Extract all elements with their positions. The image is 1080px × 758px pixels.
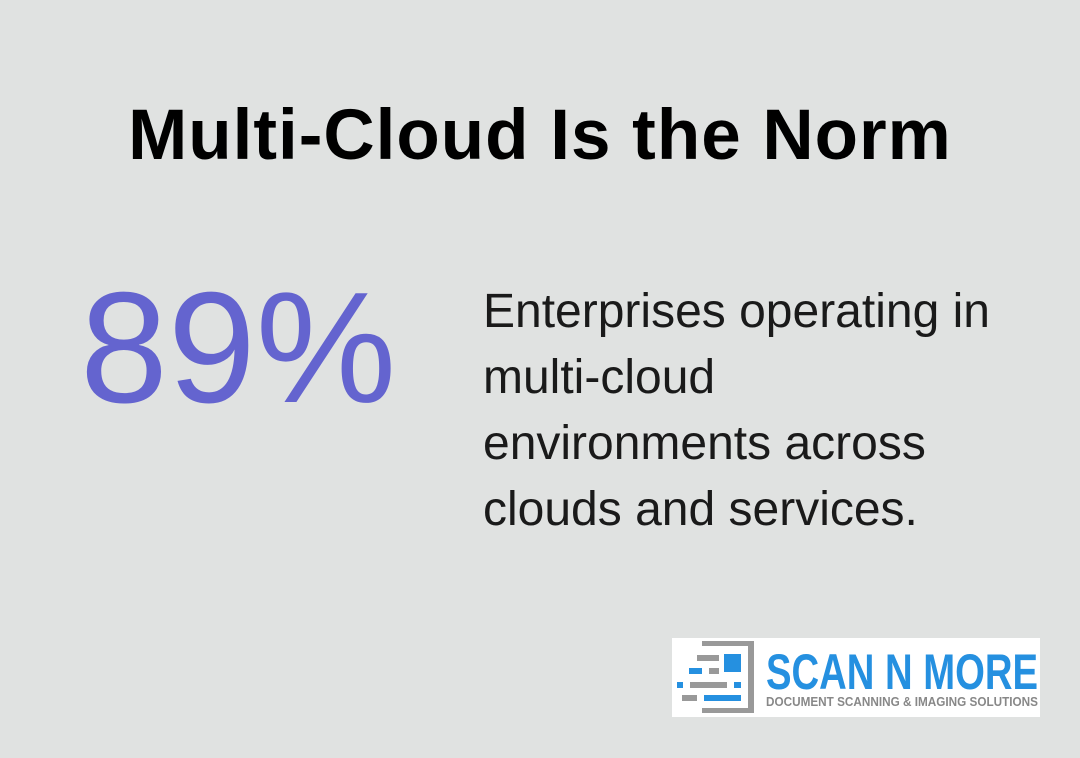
description [483, 285, 990, 536]
icon: scan bracket [677, 641, 754, 713]
stat number: 89% [80, 260, 396, 436]
description: environments across [483, 417, 926, 470]
description: Enterprises operating in [483, 285, 990, 338]
description: clouds and services. [483, 483, 918, 536]
logo [672, 638, 1040, 717]
title: Multi-Cloud Is the Norm [128, 96, 952, 175]
description: multi-cloud [483, 351, 715, 404]
